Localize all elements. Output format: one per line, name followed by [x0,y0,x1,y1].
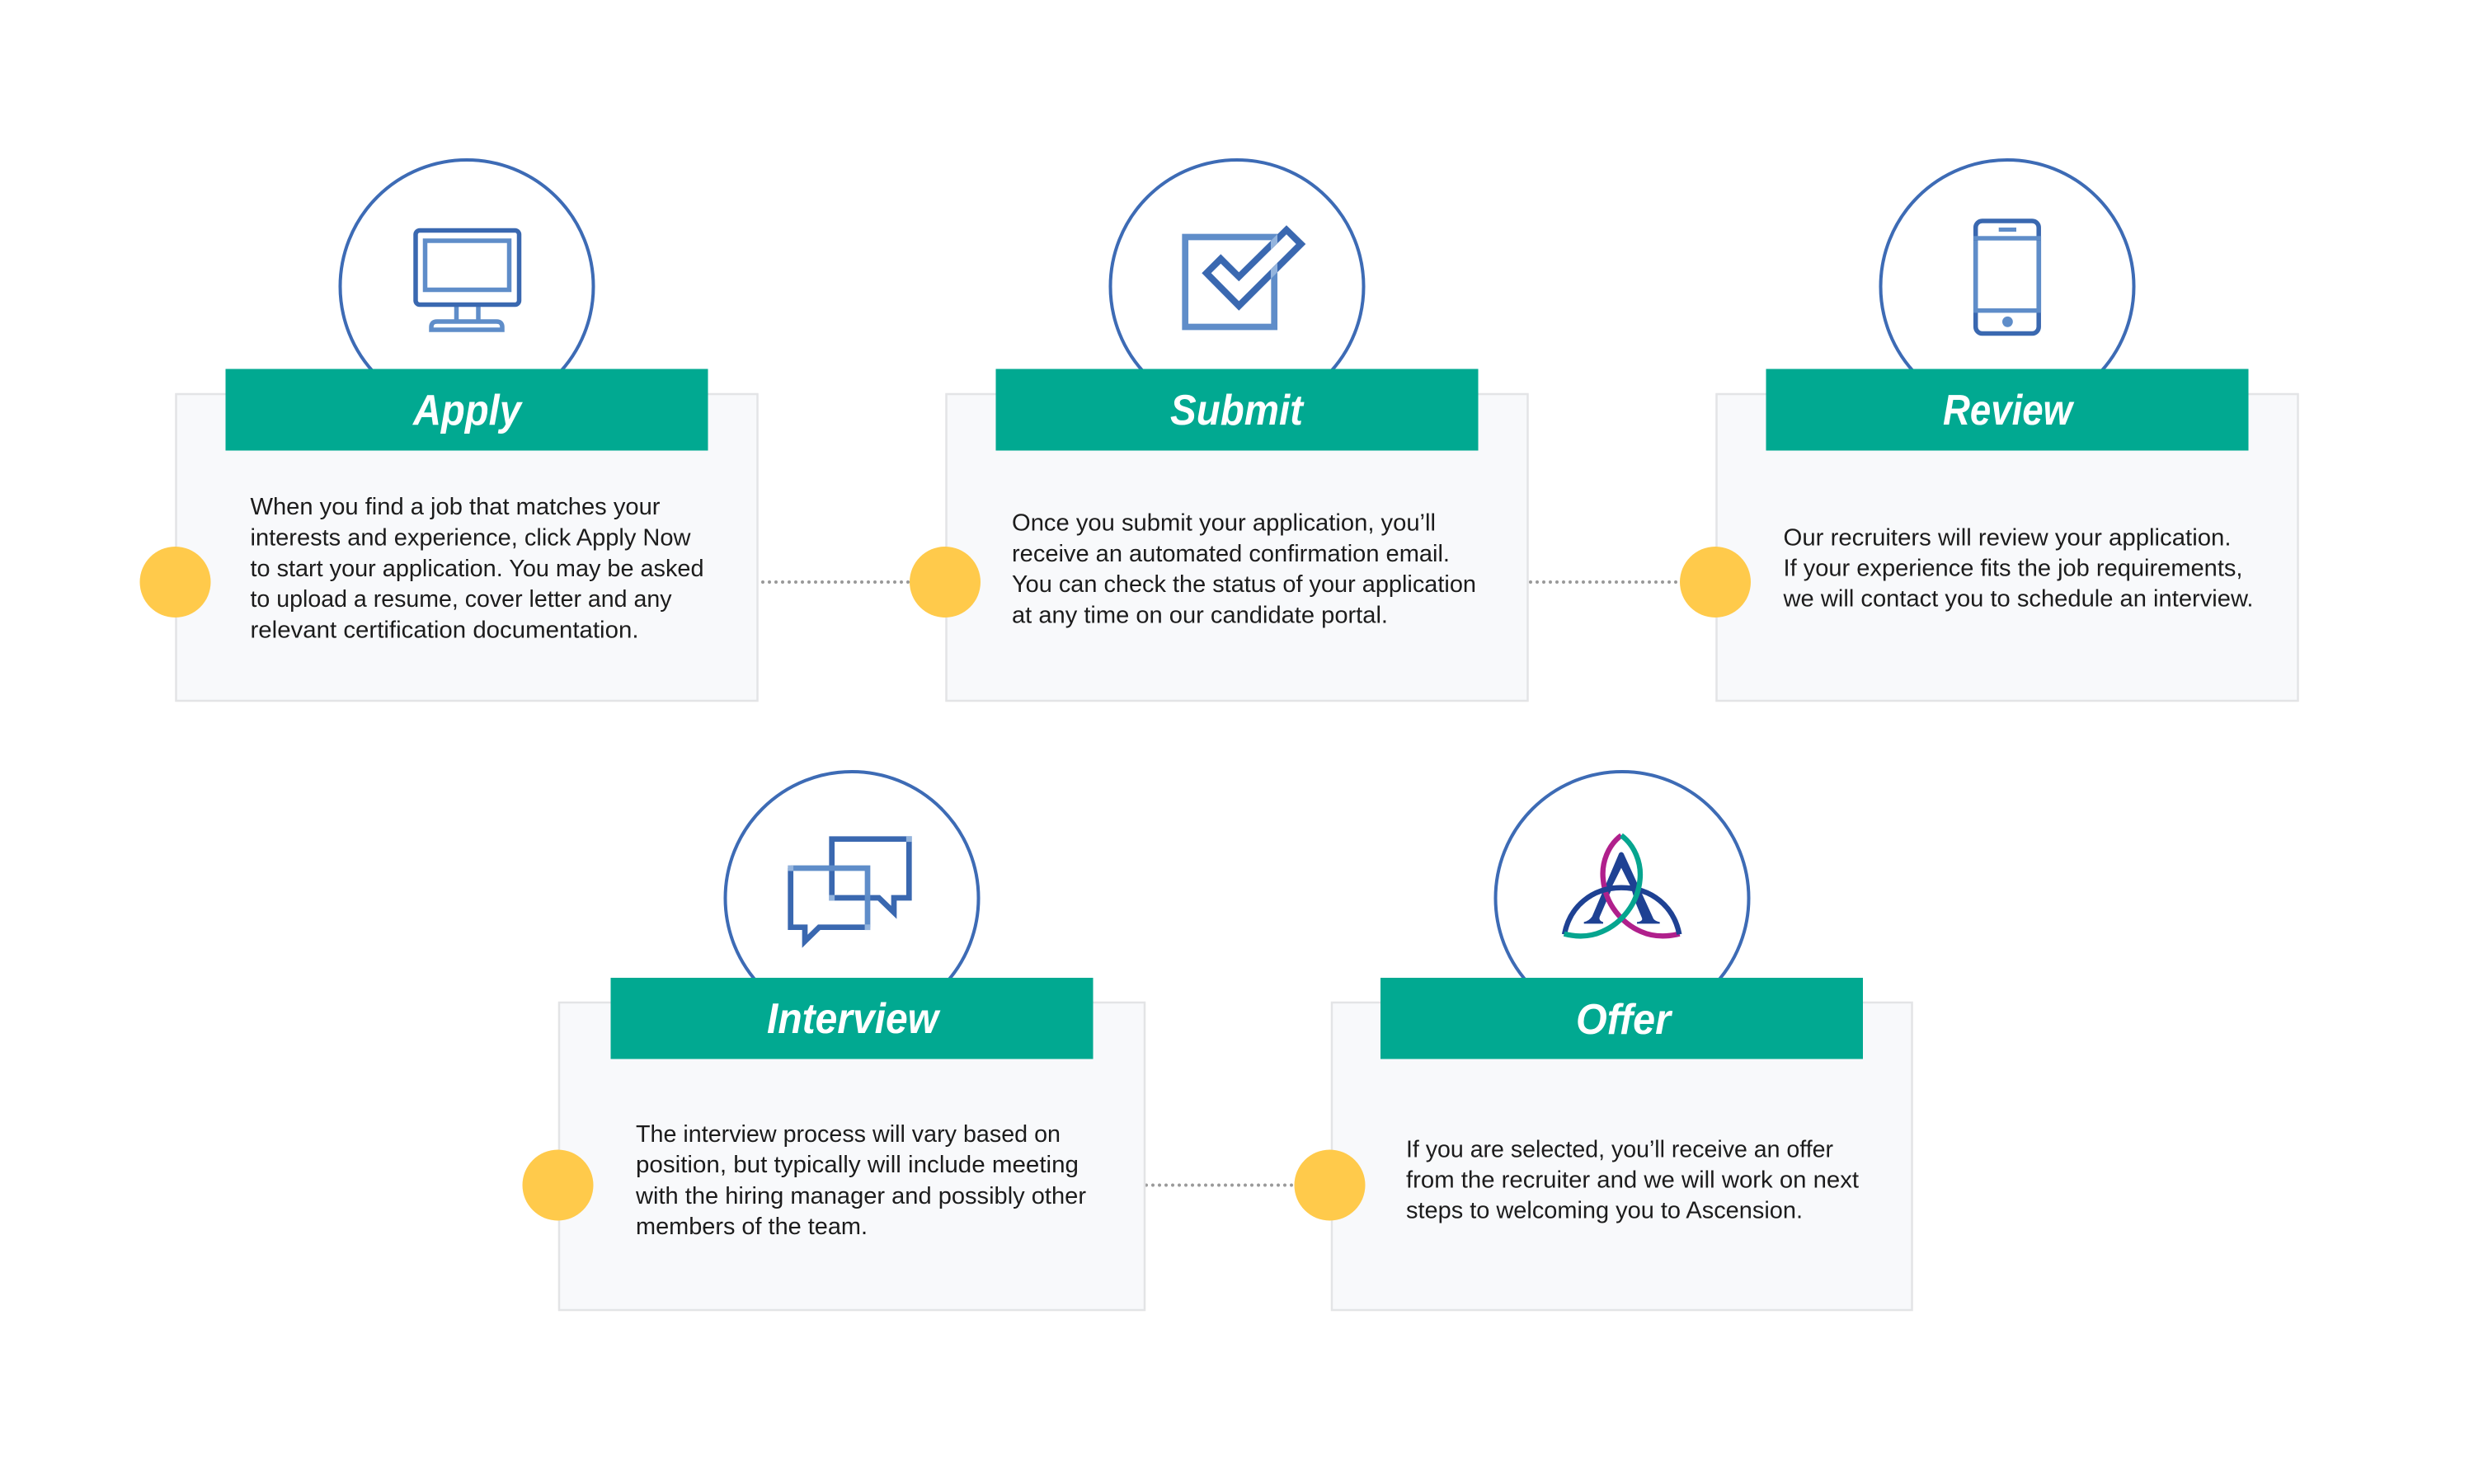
icon: desktop monitor [416,231,520,330]
heading: Interview: Interview [767,995,941,1043]
step marker: Review [1680,547,1751,618]
text block: Interview: with the hiring manager and possibly other [635,1183,1086,1209]
text block: Apply [251,494,704,643]
step marker: Submit [910,547,981,618]
text block: Interview: The interview process will vary based on [636,1121,1061,1148]
card body: Submit [947,394,1527,701]
icon: checkbox [1185,225,1305,326]
text block: Review: If your experience fits the job requirements, [1783,556,2243,582]
card body: Review [1717,394,2298,701]
icon circle: Apply [340,160,594,413]
panel: Submit [910,160,1527,701]
text block: Interview [635,1121,1086,1240]
panel: Offer [1295,772,1912,1310]
text block: Apply: to start your application. You may be asked [251,556,704,582]
header bar: Review [1766,369,2248,450]
icon: smartphone [1973,221,2041,333]
heading: Review: Review [1943,387,2075,434]
header bar: Apply [226,369,708,450]
text block: Submit: Once you submit your application, you’ll [1012,510,1436,536]
text block: Apply: to upload a resume, cover letter and any [251,586,672,613]
text block: Apply: interests and experience, click Apply Now [251,525,692,552]
panel: Review [1680,160,2298,701]
text block: Offer: from the recruiter and we will work on next [1406,1167,1859,1194]
step marker: Apply [140,547,211,618]
heading: Offer: Offer [1576,996,1673,1044]
heading: Apply: Apply [412,387,524,434]
icon: Ascension logo [1564,835,1680,936]
text block: Interview: position, but typically will include meeting [636,1152,1079,1178]
header bar: Offer [1380,978,1863,1059]
connector: Submit to Review [1531,580,1682,584]
icon circle: Interview [726,772,978,1025]
text block: Offer [1406,1136,1859,1224]
step marker: Offer [1295,1149,1366,1220]
text block: Submit: at any time on our candidate portal. [1012,602,1388,628]
text block: Submit [1012,510,1476,628]
text block: Apply: relevant certification documentation. [251,617,638,643]
card body: Offer [1332,1003,1912,1310]
panel: Interview [523,772,1145,1310]
header bar: Submit [996,369,1478,450]
heading: Submit: Submit [1170,387,1305,434]
icon: chat bubbles [788,836,912,942]
text block: Interview: members of the team. [636,1214,868,1240]
icon circle: Review [1880,160,2134,413]
header bar: Interview [610,978,1094,1059]
text block: Review: we will contact you to schedule an interview. [1782,586,2253,613]
icon circle: Offer [1496,772,1748,1025]
text block: Review: Our recruiters will review your application. [1783,525,2232,552]
connector: Apply to Submit [763,580,913,584]
panel: Apply [140,160,757,701]
text block: Submit: You can check the status of your application [1012,571,1476,598]
text block: Offer: If you are selected, you’ll receive an offer [1406,1136,1833,1162]
icon circle: Submit [1110,160,1364,413]
step marker: Interview [523,1149,594,1220]
text block: Review [1782,525,2253,613]
card body: Apply [176,394,757,701]
connector: Interview to Offer [1146,1184,1300,1187]
text block: Submit: receive an automated confirmation email. [1012,541,1450,567]
text block: Offer: steps to welcoming you to Ascension. [1406,1198,1803,1224]
text block: Apply: When you find a job that matches your [251,494,661,520]
card body: Interview [559,1003,1145,1310]
